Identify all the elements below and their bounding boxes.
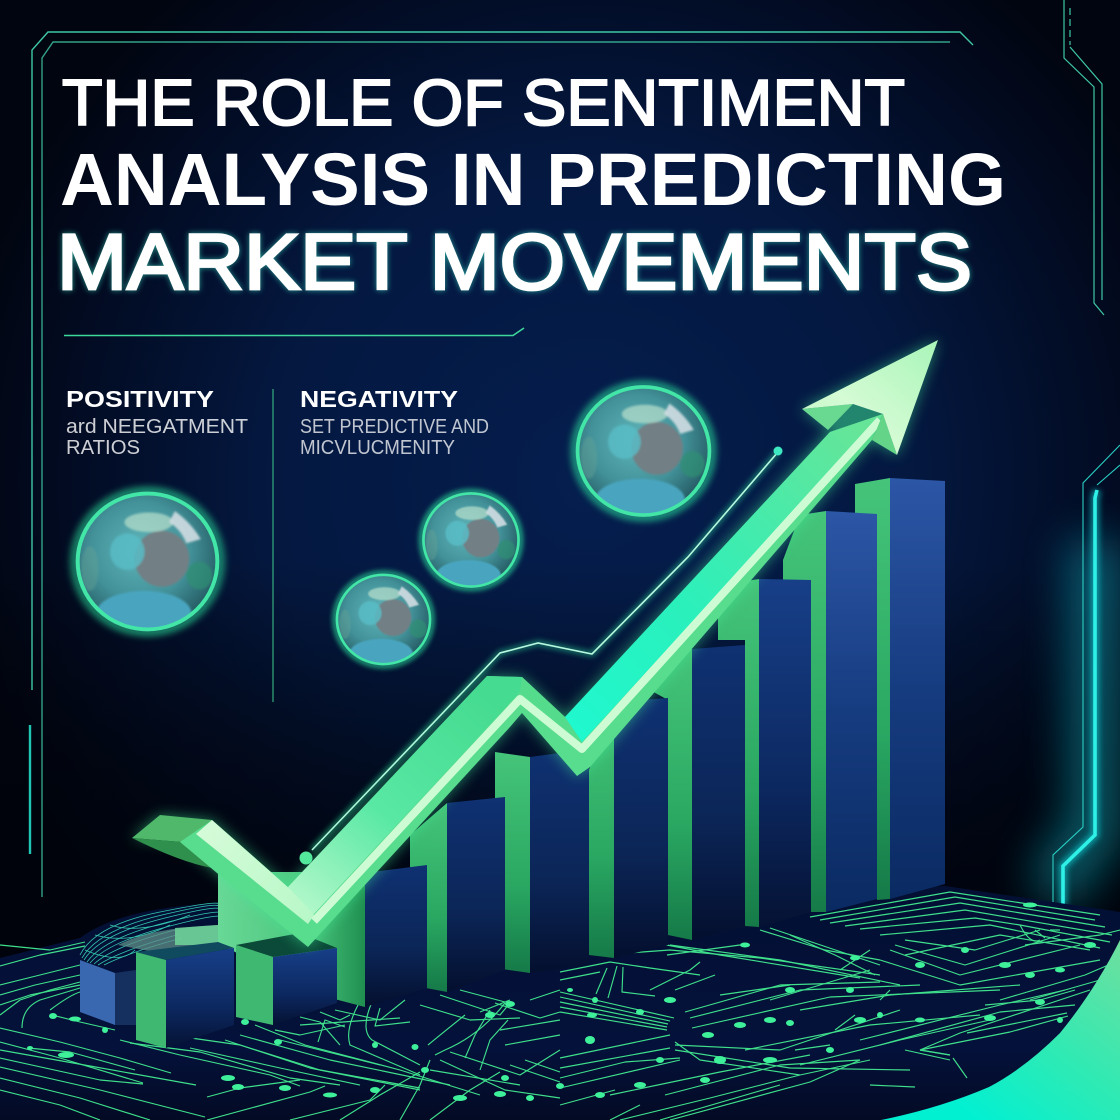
bar 5 xyxy=(495,749,589,973)
swirl traces xyxy=(80,903,221,965)
top-right tech frame xyxy=(1064,0,1104,315)
right neon circuit line xyxy=(1053,445,1120,905)
circuit floor xyxy=(0,886,1120,1120)
top-left tech frame xyxy=(30,32,973,897)
negativity body line 1: SET PREDICTIVE AND xyxy=(300,416,489,438)
line xyxy=(312,452,778,850)
bar 3 xyxy=(340,865,427,1007)
cube 2 xyxy=(236,933,337,1025)
bar 7 xyxy=(650,645,745,940)
tail highlight xyxy=(196,820,314,924)
title line 3: MARKET MOVEMENTS xyxy=(57,217,972,306)
trace nodes xyxy=(27,902,1096,1101)
line glow xyxy=(312,452,778,850)
bar chart xyxy=(80,478,945,1048)
ridge highlight xyxy=(314,420,880,921)
floor plate xyxy=(0,886,1120,1120)
rising face one xyxy=(288,676,522,915)
bar 10 xyxy=(855,478,945,900)
bottom-right teal swoosh xyxy=(881,940,1120,1120)
bar 6 xyxy=(589,698,668,958)
column: negativity xyxy=(300,386,489,459)
back green block xyxy=(218,872,365,1007)
negativity body line 2: MICVLUCMENITY xyxy=(300,437,455,459)
neon glow stroke xyxy=(1063,490,1097,905)
negativity heading: NEGATIVITY xyxy=(300,386,458,412)
falling face xyxy=(520,677,582,742)
bubble: lower xyxy=(335,573,432,668)
positivity body line 2: RATIOS xyxy=(66,437,140,459)
end dot xyxy=(774,446,782,456)
right traces xyxy=(560,892,1120,1120)
positivity body line 1: ard NEEGATMENT xyxy=(66,416,248,438)
title glow line 3: MARKET MOVEMENTS xyxy=(57,217,972,306)
thin trend line xyxy=(300,446,782,864)
left traces xyxy=(0,942,560,1120)
positivity heading: POSITIVITY xyxy=(66,386,214,412)
arrow side xyxy=(180,414,883,947)
cube 1 xyxy=(136,942,234,1048)
bubble: left large xyxy=(75,491,220,636)
cyan glow xyxy=(1063,540,1095,900)
title line 2: ANALYSIS IN PREDICTING xyxy=(60,138,1006,221)
lens disc behind cubes xyxy=(118,925,218,955)
arrow head xyxy=(802,340,938,455)
bar 8 xyxy=(718,579,811,927)
column divider xyxy=(272,389,274,702)
bar 4 xyxy=(410,797,505,992)
bubble: top xyxy=(575,384,712,521)
thin outer line xyxy=(1053,445,1120,905)
title underline xyxy=(64,328,524,336)
bubble: middle xyxy=(422,492,520,591)
back blue cube xyxy=(80,960,136,1025)
title line 1: THE ROLE OF SENTIMENT xyxy=(62,66,905,139)
thin inner line xyxy=(1097,465,1120,485)
arrow glow xyxy=(132,340,938,947)
column: positivity xyxy=(66,386,248,459)
start dot xyxy=(300,852,312,864)
rising face two xyxy=(565,414,883,742)
title xyxy=(57,66,1006,306)
rising arrow xyxy=(132,340,938,947)
bar 9 xyxy=(783,511,877,912)
tail head xyxy=(132,815,212,868)
neon core stroke xyxy=(1063,490,1097,905)
